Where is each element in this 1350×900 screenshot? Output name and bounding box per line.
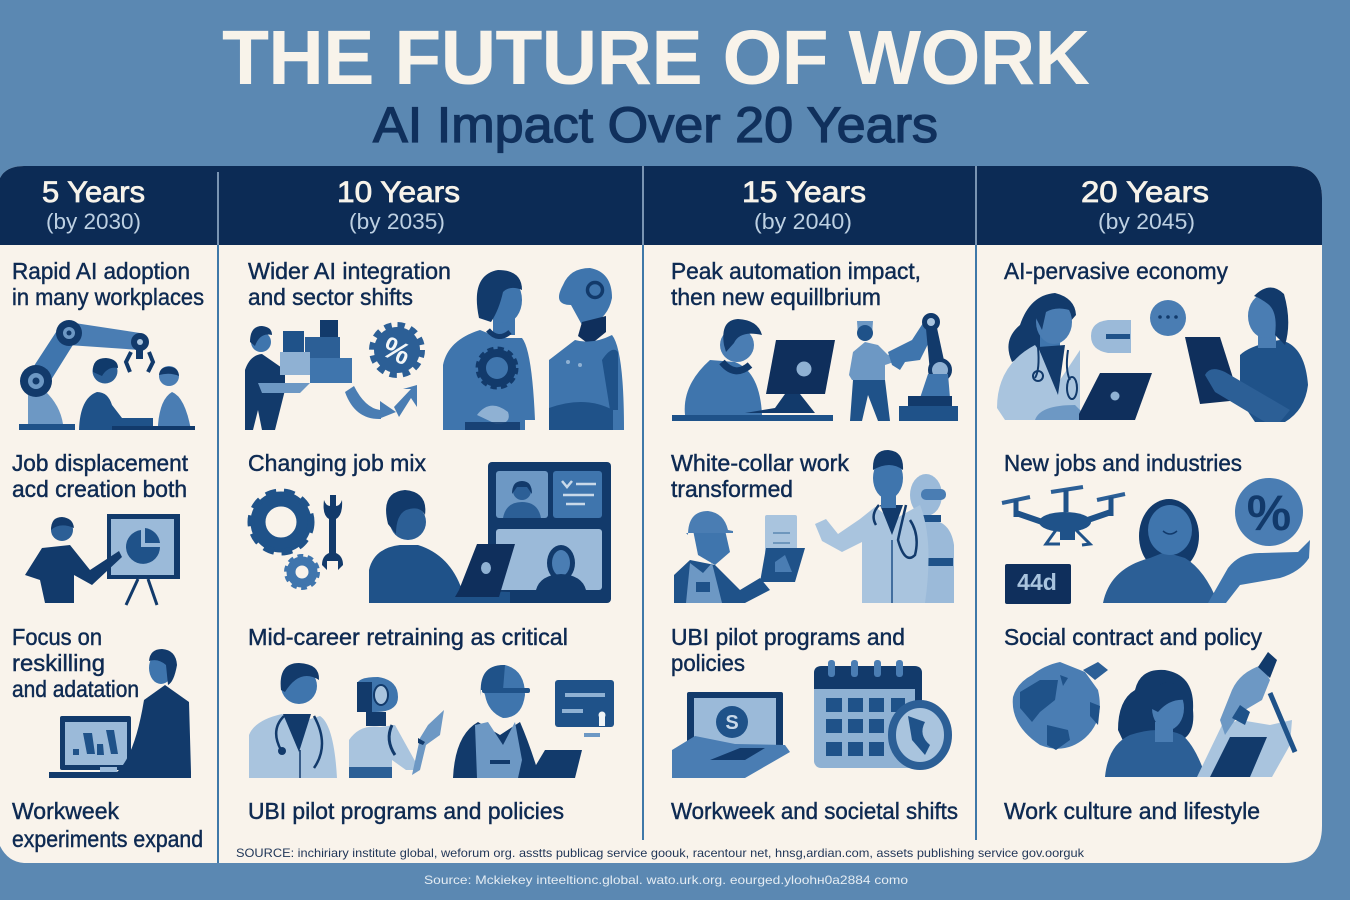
- column 1 text: Focus on: [12, 624, 102, 650]
- column 4 text: Social contract and policy: [1004, 624, 1262, 650]
- column header: 10 years: [337, 176, 460, 234]
- icon: laptop with cash in hand: S: [725, 712, 739, 734]
- icon: person at monitor with bar chart: [49, 649, 191, 778]
- icon: presenter with pie chart board: [25, 514, 180, 605]
- column 3 text: Peak automation impact,: [671, 258, 921, 284]
- icon: globe: [1013, 662, 1108, 750]
- icon: stat box 44d: 44d: [1017, 569, 1057, 595]
- icon: woman holding percent: [1103, 478, 1310, 603]
- column 2 text: Wider AI integration: [248, 258, 451, 284]
- icon: person at computer: [672, 319, 835, 421]
- column 4 text: [1004, 258, 1262, 824]
- source line: SOURCE: inchiriary institute global, weforum org. asstts publicag service goouk, racentour net, hnsg,ardian.com, assets publishing service gov.oorguk: [236, 846, 1085, 860]
- icon: doctor, robot and worker: [249, 663, 614, 778]
- column 1 text: acd creation both: [12, 476, 187, 502]
- column header: 10 years: (by 2035): [349, 209, 445, 234]
- column 1 text: Job displacement: [12, 450, 189, 476]
- panel: timeline table: [0, 166, 1322, 863]
- icon: hand holding stylus and tablet: [1197, 652, 1295, 777]
- icon: worker carrying boxes: [245, 320, 352, 430]
- footer source: Source: Mckiekey inteeltionc.global. wato.urk.org. eourged.yloohн0a2884 como: [424, 873, 908, 887]
- title: THE FUTURE OF WORK: [222, 15, 1090, 101]
- column 2 text: Mid-career retraining as critical: [248, 624, 568, 650]
- icon: calendar with globe: [814, 660, 948, 768]
- icon: percent gear: %: [377, 331, 415, 372]
- header band: [0, 166, 1322, 245]
- column header: 20 years: 20 Years: [1081, 176, 1209, 209]
- column header: 20 years: (by 2045): [1098, 209, 1195, 234]
- column 1 text: and adatation: [12, 676, 139, 702]
- column header: 5 years: 5 Years: [42, 176, 145, 209]
- icon: woman holding percent: %: [1247, 485, 1291, 541]
- icon: man with gear shirt: [443, 270, 535, 430]
- icon: doctor and robot: [815, 450, 954, 603]
- icon: percent gear: [373, 326, 421, 374]
- column header: 15 years: [742, 176, 866, 234]
- column header: 15 years: 15 Years: [742, 176, 866, 209]
- column 3 text: then new equillbrium: [671, 284, 881, 310]
- column 2 text: Changing job mix: [248, 450, 426, 476]
- column 1 text: reskilling: [12, 650, 105, 676]
- icon: curved arrows: [345, 385, 417, 419]
- column header: 5 years: (by 2030): [46, 209, 141, 234]
- column 1 text: [12, 258, 204, 852]
- subtitle: AI Impact Over 20 Years: [373, 97, 938, 153]
- column header: 20 years: [1081, 176, 1209, 234]
- icon: laptop with cash in hand: [672, 692, 790, 778]
- icon: robot figure: [549, 268, 624, 430]
- icon: woman with tablet: [1185, 287, 1308, 422]
- column 3 text: UBI pilot programs and: [671, 624, 905, 650]
- icon: woman with long hair: [1105, 670, 1206, 777]
- column header: 15 years: (by 2040): [754, 209, 852, 234]
- icon: stat box 44d: [1005, 564, 1071, 604]
- icon: gears and wrench: [251, 492, 343, 588]
- icon: worker with robot arm: [849, 313, 958, 421]
- column 1 text: Workweek: [12, 798, 119, 824]
- column 1 text: in many workplaces: [12, 284, 204, 310]
- column 2 text: UBI pilot programs and policies: [248, 798, 564, 824]
- column header: 5 years: [42, 176, 145, 234]
- icon: person at laptop with video call: [369, 462, 611, 603]
- icon: worker with tablet and paper: [674, 511, 805, 603]
- column 1 text: experiments expand: [12, 826, 203, 852]
- column 1 text: Rapid AI adoption: [12, 258, 190, 284]
- column header: 10 years: 10 Years: [337, 176, 460, 209]
- icon: chat bubble: [1150, 300, 1186, 336]
- column 4 text: New jobs and industries: [1004, 450, 1242, 476]
- column 3 text: transformed: [671, 476, 793, 502]
- icon: robot arm with two people: [19, 320, 195, 430]
- column 3 text: policies: [671, 650, 745, 676]
- column 4 text: AI-pervasive economy: [1004, 258, 1228, 284]
- column 3 text: [671, 258, 958, 824]
- column 3 text: White-collar work: [671, 450, 849, 476]
- icon: doctor at laptop: [997, 293, 1152, 420]
- column 4 text: Work culture and lifestyle: [1004, 798, 1260, 824]
- column 2 text: [248, 258, 568, 824]
- icon: drone: [1002, 487, 1125, 545]
- column 2 text: and sector shifts: [248, 284, 413, 310]
- column 3 text: Workweek and societal shifts: [671, 798, 958, 824]
